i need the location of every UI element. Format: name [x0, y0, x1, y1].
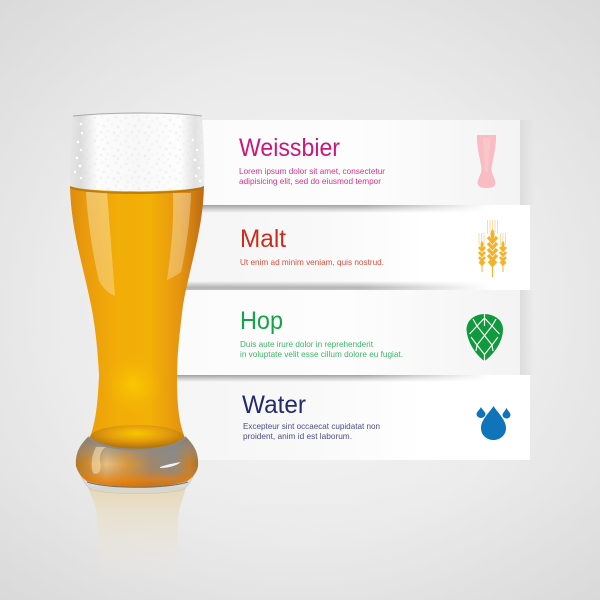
- beer body: [70, 186, 204, 442]
- text block: Water description: Excepteur sint occaecat cupidatat non: [243, 421, 380, 431]
- text block: Water description: [243, 421, 380, 441]
- shadow under Weissbier panel: [202, 205, 478, 212]
- icon: water drops: [476, 406, 510, 440]
- foot edge line: [87, 482, 188, 487]
- text block: Weissbier description: adipisicing elit, sed do eiusmod tempor: [239, 176, 381, 186]
- title: Weissbier: Weissbier: [239, 134, 340, 162]
- shadow above Hop panel: [186, 282, 475, 290]
- panel: Weissbier: [200, 120, 534, 205]
- highlight: right vertical: [167, 193, 191, 280]
- liquid pool at bottom: [90, 425, 184, 449]
- shadow under Hop panel: [177, 375, 478, 382]
- panel: Hop: [178, 290, 534, 375]
- glow inside stem: [103, 355, 163, 415]
- icon: wheat: [479, 220, 506, 277]
- reflection of glass: [88, 487, 186, 582]
- base of glass: [76, 437, 198, 487]
- panel: Water: [170, 375, 530, 460]
- title: Malt: Malt: [240, 225, 286, 253]
- icon: hop cone: [466, 314, 503, 361]
- text block: Hop description: Duis aute irure dolor in reprehenderit: [240, 339, 374, 349]
- highlight: left vertical: [86, 192, 115, 296]
- title: Water: Water: [242, 391, 306, 419]
- title: Hop: Hop: [240, 307, 283, 335]
- beer glass: [70, 113, 204, 494]
- text block: Weissbier description: [239, 166, 385, 186]
- panel: Malt: [170, 205, 530, 290]
- text block: Weissbier description: Lorem ipsum dolor sit amet, consectetur: [239, 166, 385, 176]
- icon: beer glass: [477, 135, 496, 188]
- text block: Water description: proident, anim id est laborum.: [243, 431, 352, 441]
- foam: [70, 113, 204, 191]
- text block: Malt description: Ut enim ad minim veniam, quis nostrud.: [240, 257, 384, 267]
- text block: Hop description: [240, 339, 403, 359]
- outer glass foot: [79, 472, 195, 494]
- text block: Hop description: in voluptate velit esse cillum dolore eu fugiat.: [240, 349, 403, 359]
- dark line under foam: [70, 186, 204, 194]
